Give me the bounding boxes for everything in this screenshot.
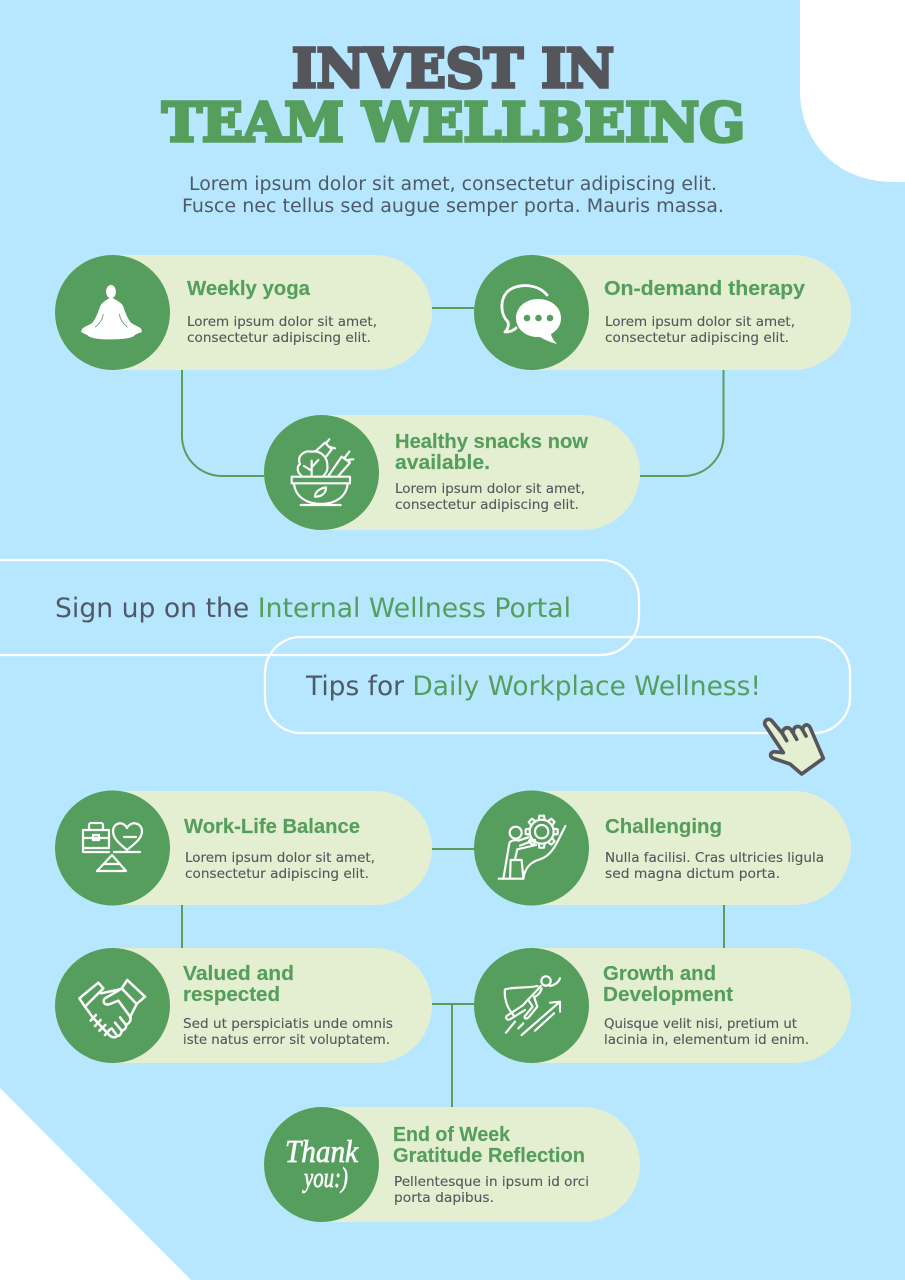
text: therapy description — [605, 315, 795, 346]
panel: valued and respected — [55, 948, 432, 1063]
heading: end of week gratitude reflection: Gratitude Reflection — [393, 1144, 585, 1167]
subtitle text block: Fusce nec tellus sed augue semper porta. Mauris massa. — [182, 196, 724, 217]
subtitle text block — [182, 174, 724, 217]
text: gratitude description: Pellentesque in ipsum id orci — [394, 1175, 589, 1190]
text: gratitude description: porta dapibus. — [394, 1191, 494, 1206]
heading: growth and development: Growth and — [603, 962, 716, 985]
decorative white corner: bottom left — [0, 1088, 191, 1280]
text: balance description — [185, 851, 375, 882]
heading: end of week gratitude reflection — [393, 1123, 585, 1167]
text: balance description: Lorem ipsum dolor sit amet, — [185, 851, 375, 866]
text: challenging description — [605, 851, 824, 882]
heading: valued and respected: respected — [183, 983, 280, 1006]
connector lines: bottom section — [182, 849, 724, 1107]
panel: healthy snacks — [264, 415, 640, 530]
title: TEAM WELLBEING — [162, 92, 745, 154]
callout banner: wellness portal: Sign up on the Internal Wellness Portal — [55, 593, 571, 624]
heading: valued and respected — [183, 962, 294, 1006]
icon: handwritten thank you — [285, 1133, 359, 1194]
heading: challenging: Challenging — [605, 815, 722, 838]
callout banner: daily wellness tips: Tips for Daily Workplace Wellness! — [305, 671, 761, 702]
text: growth description — [604, 1017, 809, 1048]
heading: healthy snacks — [395, 430, 588, 474]
panel: end of week gratitude — [264, 1107, 640, 1222]
panel: weekly yoga — [55, 255, 432, 370]
heading: work-life balance: Work-Life Balance — [184, 815, 360, 838]
text: valued description — [183, 1017, 393, 1048]
icon: figure pushing gear uphill — [499, 816, 565, 879]
icon: handwritten thank you: Thank — [285, 1133, 359, 1169]
icon: balance scale with briefcase and heart — [83, 823, 142, 871]
text: valued description: Sed ut perspiciatis unde omnis — [183, 1017, 393, 1032]
text: valued description: iste natus error sit voluptatem. — [183, 1033, 390, 1048]
icon: handwritten thank you: you:) — [302, 1163, 348, 1194]
heading: growth and development: Development — [603, 983, 733, 1006]
subtitle text block: Lorem ipsum dolor sit amet, consectetur adipiscing elit. — [189, 174, 717, 195]
panel: work-life balance — [55, 790, 432, 906]
icon: handshake — [79, 980, 145, 1037]
text: gratitude description — [394, 1175, 589, 1206]
text: challenging description: sed magna dictum porta. — [605, 867, 780, 882]
connector lines: top section — [182, 308, 724, 476]
callout banner: daily wellness tips — [265, 637, 850, 733]
heading: valued and respected: Valued and — [183, 962, 294, 985]
text: snacks description: Lorem ipsum dolor sit amet, — [395, 482, 585, 497]
text: snacks description: consectetur adipiscing elit. — [395, 498, 579, 513]
icon: pointing hand — [765, 719, 823, 774]
icon: chat bubbles — [502, 286, 561, 344]
decorative white corner: top right — [800, 0, 905, 182]
icon: flying hero with arrows — [505, 976, 560, 1035]
text: weekly yoga description: Lorem ipsum dolor sit amet, — [187, 315, 377, 330]
text: snacks description — [395, 482, 585, 513]
heading: weekly yoga: Weekly yoga — [187, 277, 311, 300]
title — [162, 38, 745, 154]
heading: healthy snacks: available. — [395, 451, 490, 474]
panel: on-demand therapy — [474, 255, 851, 370]
text: therapy description: Lorem ipsum dolor sit amet, — [605, 315, 795, 330]
heading: healthy snacks: Healthy snacks now — [395, 430, 588, 453]
text: challenging description: Nulla facilisi. Cras ultricies ligula — [605, 851, 824, 866]
callout banner: wellness portal — [0, 560, 639, 655]
heading: on-demand therapy: On-demand therapy — [604, 277, 806, 300]
text: weekly yoga description — [187, 315, 377, 346]
icon: salad bowl — [292, 439, 353, 505]
heading: end of week gratitude reflection: End of Week — [393, 1123, 511, 1146]
text: balance description: consectetur adipiscing elit. — [185, 867, 369, 882]
text: growth description: lacinia in, elementum id enim. — [604, 1033, 809, 1048]
text: growth description: Quisque velit nisi, pretium ut — [604, 1017, 797, 1032]
icon: meditating figure — [81, 285, 142, 339]
text: weekly yoga description: consectetur adipiscing elit. — [187, 331, 371, 346]
panel: growth and development — [474, 948, 851, 1063]
panel: challenging — [474, 790, 851, 906]
heading: growth and development — [603, 962, 733, 1006]
title: INVEST IN — [292, 38, 614, 100]
text: therapy description: consectetur adipiscing elit. — [605, 331, 789, 346]
